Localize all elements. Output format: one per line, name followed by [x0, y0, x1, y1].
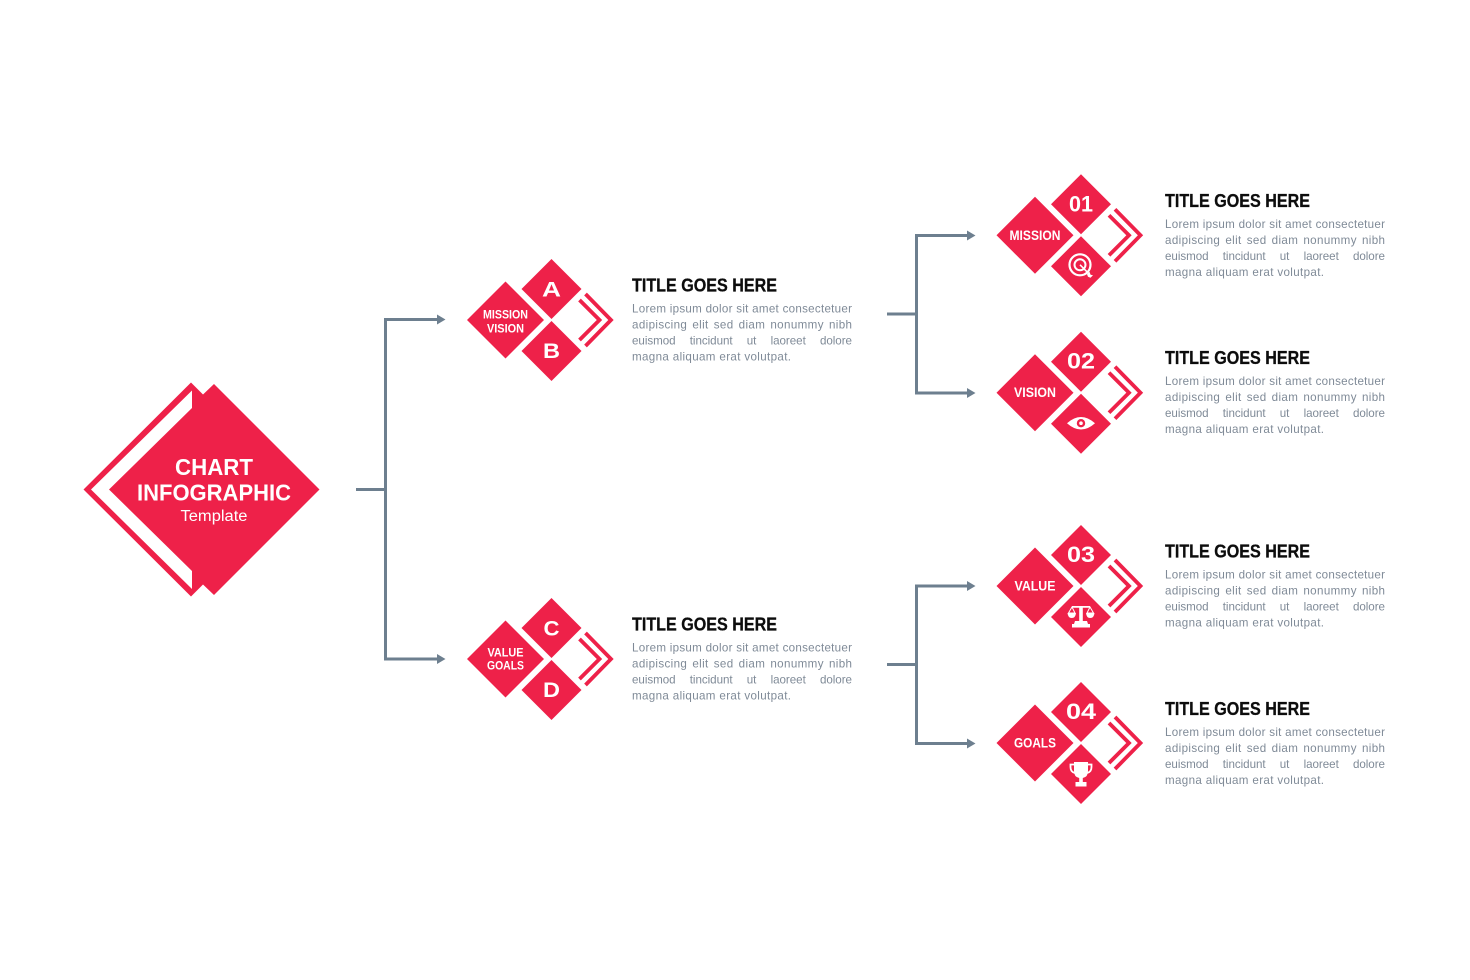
node: value 03: 03 [1067, 542, 1095, 567]
text block: 03: Lorem ipsum dolor sit amet consectetuer [1165, 568, 1385, 582]
node: mission vision A B: VISION [487, 322, 524, 336]
text block: C D: magna aliquam erat volutpat. [632, 690, 791, 702]
text block: 04: euismod tincidunt ut laoreet dolore [1165, 758, 1385, 771]
text block: 02: euismod tincidunt ut laoreet dolore [1165, 407, 1385, 420]
text block: C D: Lorem ipsum dolor sit amet consectetuer [632, 642, 852, 654]
text block: A B: TITLE GOES HERE [632, 274, 777, 296]
icon: target [1070, 254, 1093, 278]
node: value goals C D: VALUE [488, 646, 524, 660]
node: mission 01: MISSION [1010, 228, 1060, 243]
text block: 03: adipiscing elit sed diam nonummy nibh [1165, 584, 1385, 598]
node: value 03: VALUE [1014, 578, 1056, 594]
text block: 01 [1165, 190, 1385, 279]
node: value goals C D: D [543, 679, 560, 702]
node: mission vision A B: B [543, 340, 560, 363]
arrow connector: centre to A/B and C/D [356, 314, 446, 664]
node: mission vision A B [467, 259, 611, 381]
icon: eye [1067, 417, 1095, 429]
text block: A B: magna aliquam erat volutpat. [632, 350, 791, 364]
node: mission 01 [996, 174, 1140, 296]
text block: 01: adipiscing elit sed diam nonummy nibh [1165, 234, 1385, 247]
text block: 01: magna aliquam erat volutpat. [1165, 266, 1324, 279]
text block: C D [632, 614, 852, 702]
text block: 02 [1165, 347, 1385, 436]
text block: 01: Lorem ipsum dolor sit amet consectetuer [1165, 218, 1385, 231]
node: mission vision A B: MISSION [483, 308, 528, 322]
text block: 03: euismod tincidunt ut laoreet dolore [1165, 600, 1385, 614]
text block: 04: Lorem ipsum dolor sit amet consectetuer [1165, 726, 1385, 739]
text block: 04: adipiscing elit sed diam nonummy nibh [1165, 742, 1385, 755]
node: vision 02 [996, 332, 1140, 454]
arrow connector: C/D to 03 and 04 [887, 581, 976, 748]
node: value goals C D: GOALS [487, 658, 524, 672]
text block: 02: adipiscing elit sed diam nonummy nibh [1165, 391, 1385, 404]
node: goals 04 [996, 682, 1140, 804]
icon: scales [1068, 606, 1094, 628]
central diamond: chart infographic template: Template [180, 508, 248, 525]
central diamond: chart infographic template: CHART [175, 454, 253, 480]
text block: 02: TITLE GOES HERE [1165, 347, 1310, 368]
text block: A B [632, 274, 852, 364]
text block: 02: magna aliquam erat volutpat. [1165, 423, 1324, 436]
node: value goals C D: C [544, 618, 560, 640]
text block: 04: magna aliquam erat volutpat. [1165, 774, 1324, 787]
node: goals 04: GOALS [1014, 736, 1056, 750]
node: vision 02: 02 [1067, 349, 1095, 374]
central diamond: chart infographic template [84, 382, 320, 596]
node: mission vision A B: A [542, 278, 561, 302]
text block: 02: Lorem ipsum dolor sit amet consectetuer [1165, 375, 1385, 388]
text block: C D: euismod tincidunt ut laoreet dolore [632, 674, 852, 686]
node: value 03 [996, 525, 1140, 647]
text block: 03: TITLE GOES HERE [1165, 540, 1310, 562]
node: value goals C D [467, 598, 611, 720]
text block: 01: euismod tincidunt ut laoreet dolore [1165, 250, 1385, 263]
node: vision 02: VISION [1014, 385, 1056, 400]
central diamond: chart infographic template: INFOGRAPHIC [137, 480, 291, 506]
text block: 04: TITLE GOES HERE [1165, 698, 1310, 719]
text block: C D: adipiscing elit sed diam nonummy nibh [632, 658, 852, 670]
text block: 01: TITLE GOES HERE [1165, 190, 1310, 211]
text block: 03 [1165, 540, 1385, 630]
text block: A B: euismod tincidunt ut laoreet dolore [632, 334, 852, 348]
arrow connector: A/B to 01 and 02 [887, 230, 976, 398]
text block: 03: magna aliquam erat volutpat. [1165, 616, 1324, 630]
node: goals 04: 04 [1066, 699, 1097, 724]
text block: A B: Lorem ipsum dolor sit amet consectetuer [632, 302, 852, 316]
node: mission 01: 01 [1069, 191, 1093, 216]
text block: A B: adipiscing elit sed diam nonummy nibh [632, 318, 852, 332]
icon: trophy [1070, 762, 1092, 786]
text block: 04 [1165, 698, 1385, 787]
text block: C D: TITLE GOES HERE [632, 614, 777, 634]
